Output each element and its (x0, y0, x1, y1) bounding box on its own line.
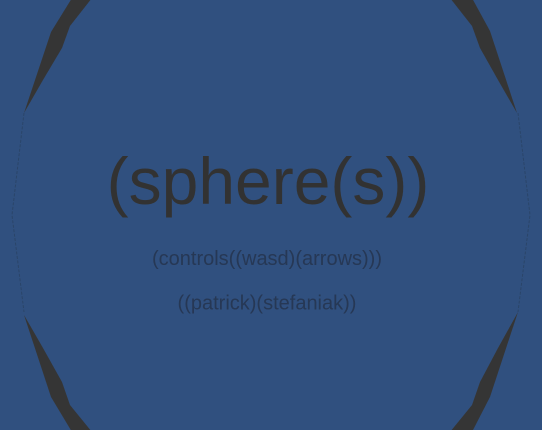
bottom left arc segment (24, 315, 92, 430)
left dashed edge (12, 113, 24, 312)
title: (sphere(s)) (107, 144, 429, 218)
bottom right arc segment (450, 312, 518, 430)
text block (107, 144, 429, 314)
right dashed edge (518, 113, 530, 312)
author credit: ((patrick)(stefaniak)) (178, 292, 356, 314)
controls line: (controls((wasd)(arrows))) (152, 248, 382, 270)
top left arc segment (24, 0, 92, 113)
top right arc segment (450, 0, 517, 113)
